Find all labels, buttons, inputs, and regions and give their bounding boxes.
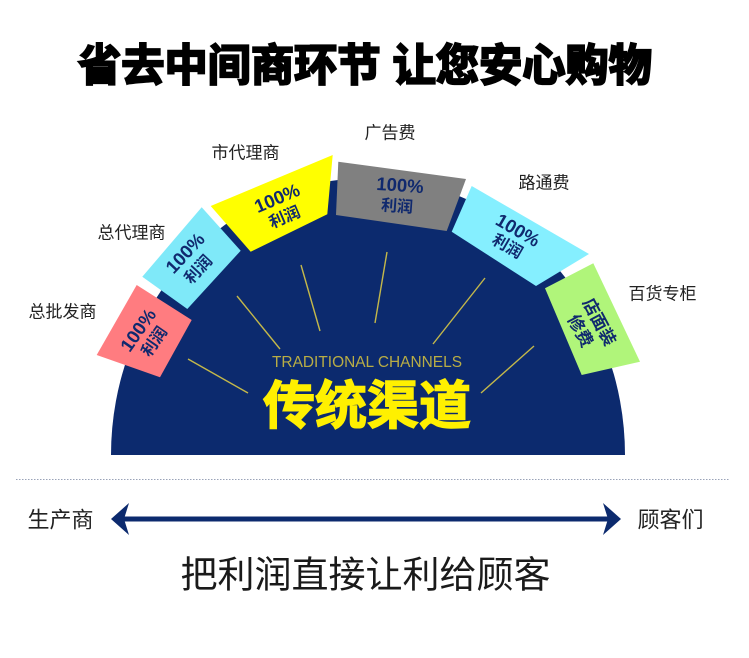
arrow: double-headed bbox=[111, 503, 621, 535]
panel: road toll bbox=[452, 186, 589, 286]
panel: city agent: 利润 bbox=[266, 202, 303, 232]
panel: wholesaler: 100% bbox=[116, 305, 160, 355]
rays bbox=[188, 252, 534, 393]
panel: city agent bbox=[211, 155, 333, 252]
label: customers: 顾客们 bbox=[637, 508, 704, 532]
panel: city agent: 100% bbox=[251, 179, 303, 217]
panel: wholesaler: 利润 bbox=[137, 323, 171, 360]
panel: store renovation: 修费 bbox=[564, 312, 596, 350]
panel: store renovation: 店面装 bbox=[579, 295, 619, 349]
label: general agent: 总代理商 bbox=[98, 224, 166, 242]
panel: road toll: 100% bbox=[492, 209, 544, 251]
label: producer: 生产商 bbox=[27, 508, 94, 532]
label: department store counter: 百货专柜 bbox=[628, 284, 696, 304]
label: wholesaler: 总批发商 bbox=[28, 302, 96, 322]
panel: road toll: 利润 bbox=[489, 230, 526, 262]
panel: advertising fee bbox=[336, 162, 466, 231]
subtitle: traditional channels: TRADITIONAL CHANNELS bbox=[272, 354, 462, 371]
panel: general agent: 利润 bbox=[180, 251, 216, 288]
panel: store renovation bbox=[545, 263, 640, 375]
panel: advertising fee: 利润 bbox=[380, 195, 414, 217]
panel: general agent: 100% bbox=[161, 229, 209, 277]
semicircle: traditional channels bbox=[111, 178, 625, 455]
label: city agent: 市代理商 bbox=[212, 144, 280, 162]
title: 省去中间商环节 让您安心购物 bbox=[78, 42, 652, 90]
label: road toll: 路通费 bbox=[518, 174, 570, 192]
panel: advertising fee: 100% bbox=[376, 173, 424, 197]
panel: wholesaler bbox=[97, 285, 192, 377]
heading: 传统渠道: 传统渠道 bbox=[263, 378, 471, 436]
panel: general agent bbox=[142, 207, 241, 309]
label: advertising fee: 广告费 bbox=[364, 124, 416, 142]
closing statement: 把利润直接让利给顾客 bbox=[180, 554, 550, 596]
